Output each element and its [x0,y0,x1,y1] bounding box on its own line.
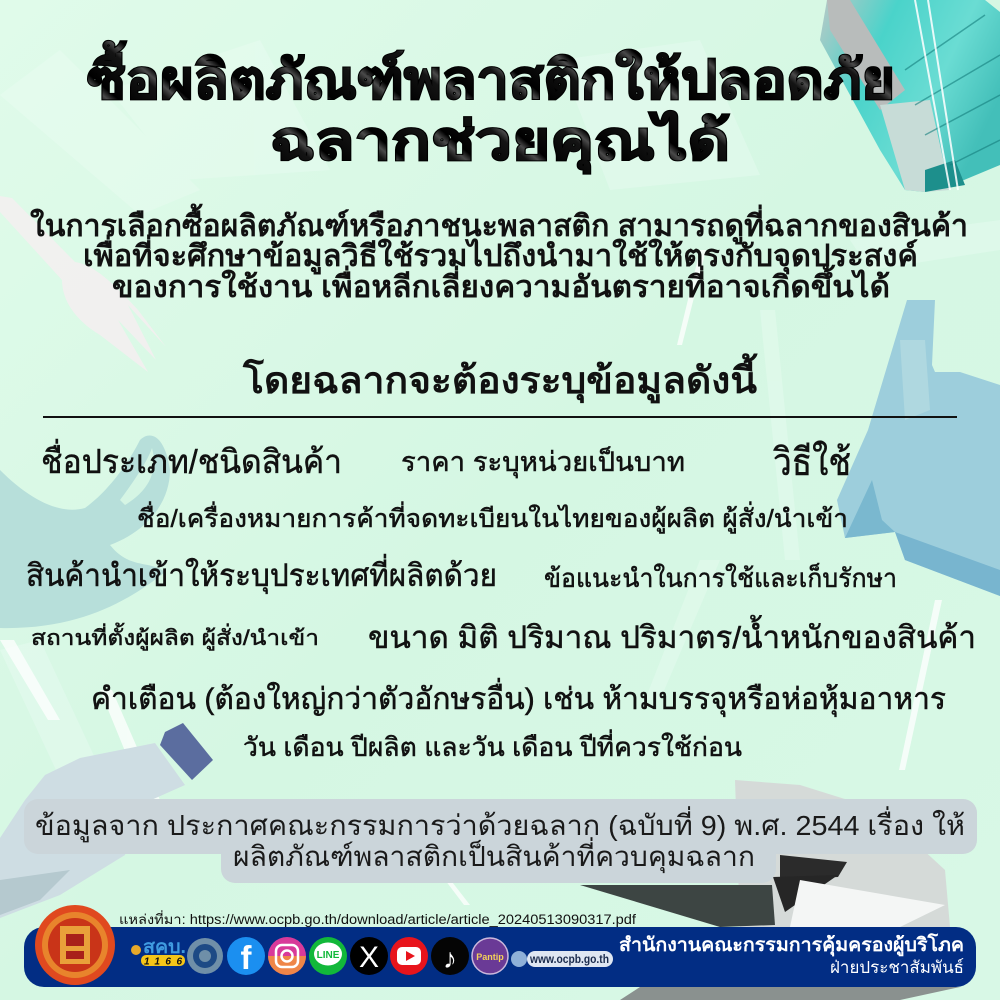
icon: tiktok [431,937,469,975]
intro paragraph [30,203,968,304]
required label items: คำเตือน (ต้องใหญ่กว่าตัวอักษรอื่น) เช่น ห้ามบรรจุหรือห่อหุ้มอาหาร [91,678,946,718]
required label items: สถานที่ตั้งผู้ผลิต ผู้สั่ง/นำเข้า [31,623,319,651]
illustration: water bottle bottom left [0,723,213,918]
agency name: ฝ่ายประชาสัมพันธ์ [830,958,964,977]
illustration: bottle top right [820,0,1000,192]
footer bar [24,927,976,987]
agency name [619,933,964,977]
required label items: วัน เดือน ปีผลิต และวัน เดือน ปีที่ควรใช้ก่อน [243,729,742,762]
required label items: ชื่อประเภท/ชนิดสินค้า [41,439,342,480]
required label items: ข้อแนะนำในการใช้และเก็บรักษา [544,562,897,593]
hotline logo: สคบ. [143,937,186,958]
required label items [26,439,976,762]
agency name: สำนักงานคณะกรรมการคุ้มครองผู้บริโภค [619,933,964,957]
illustration: food container bottom right [580,780,960,1000]
illustration: face mask [0,435,170,628]
icon: line: LINE [317,950,340,961]
required label items: ราคา ระบุหน่วยเป็นบาท [401,444,685,479]
icon: instagram [268,937,306,975]
illustration: plastic bag [837,300,1000,596]
intro paragraph: ในการเลือกซื้อผลิตภัณฑ์หรือภาชนะพลาสติก สามารถดูที่ฉลากของสินค้า [30,203,968,245]
required label items: วิธีใช้ [773,441,851,484]
icon: ocpb [187,938,223,974]
title [87,41,895,174]
required label items: สินค้านำเข้าให้ระบุประเทศที่ผลิตด้วย [26,554,497,595]
source link: แหล่งที่มา: https://www.ocpb.go.th/download/article/article_20240513090317.pdf [119,910,636,927]
icon: x: X [359,941,379,974]
hotline logo: 1166 [144,956,182,968]
section heading: โดยฉลากจะต้องระบุข้อมูลดังนี้ [242,353,758,404]
required label items: ขนาด มิติ ปริมาณ ปริมาตร/น้ำหนักของสินค้า [368,615,976,655]
source note box [24,799,977,883]
agency seal [35,905,115,985]
icon: youtube [390,937,428,975]
source note box: ข้อมูลจาก ประกาศคณะกรรมการว่าด้วยฉลาก (ฉบับที่ 9) พ.ศ. 2544 เรื่อง ให้ [35,806,965,843]
required label items: ชื่อ/เครื่องหมายการค้าที่จดทะเบียนในไทยของผู้ผลิต ผู้สั่ง/นำเข้า [137,501,848,534]
website pill [511,951,613,967]
website pill: www.ocpb.go.th [529,954,609,966]
hotline logo [131,937,186,968]
icon: tiktok: ♪ [443,943,457,974]
source note box: ผลิตภัณฑ์พลาสติกเป็นสินค้าที่ควบคุมฉลาก [233,837,755,874]
icon: pantip [472,938,508,974]
icon: x [350,937,388,975]
icon: facebook: f [240,939,252,976]
icon: facebook [227,937,265,976]
intro paragraph: ของการใช้งาน เพื่อหลีกเลี่ยงความอันตรายที่อาจเกิดขึ้นได้ [112,264,890,304]
icon: pantip: Pantip [476,952,504,962]
icon: line [309,937,347,975]
intro paragraph: เพื่อที่จะศึกษาข้อมูลวิธีใช้รวมไปถึงนำมาใช้ให้ตรงกับจุดประสงค์ [83,234,918,275]
title: ฉลากช่วยคุณได้ [270,110,730,174]
illustration: plastic fork [0,196,166,372]
title: ซื้อผลิตภัณฑ์พลาสติกให้ปลอดภัย [87,41,895,110]
